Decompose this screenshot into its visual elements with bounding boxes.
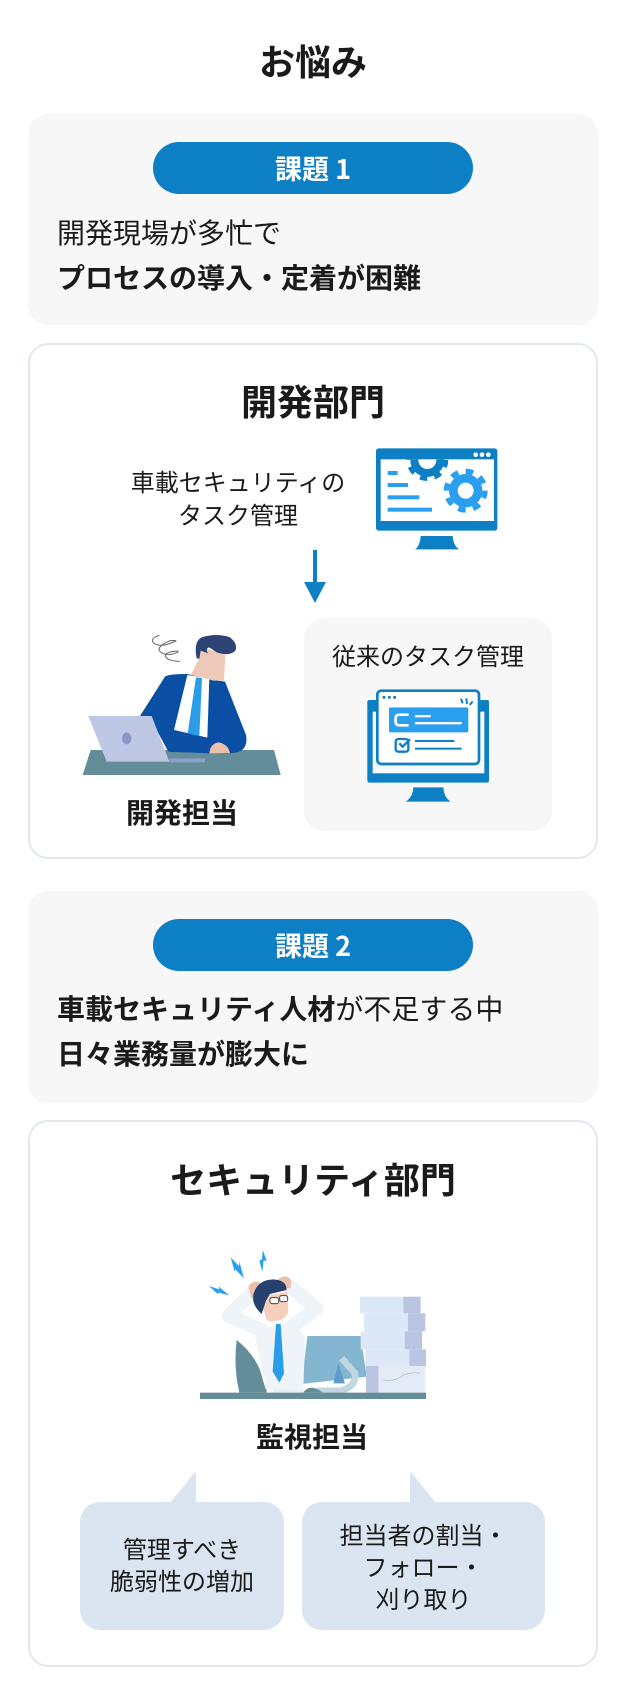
illustration: stressed monitoring officer [200, 1250, 426, 1399]
badge: issue 2 [153, 919, 473, 971]
arrow: down [304, 550, 326, 603]
text: automotive security task management: 車載セキュリティの [131, 470, 345, 497]
label: monitoring officer: 監視担当 [256, 1422, 368, 1453]
panel: conventional task management [304, 618, 552, 831]
callout: managed vulnerabilities [80, 1471, 284, 1630]
text: issue 2 description: 日々業務量が膨大に [57, 1039, 309, 1070]
text: issue 1 description: 開発現場が多忙で [57, 218, 281, 249]
callout: managed vulnerabilities: 管理すべき [123, 1537, 241, 1564]
text: issue 2 description [57, 994, 503, 1070]
label: developer: 開発担当 [126, 798, 238, 829]
heading: conventional task management: 従来のタスク管理 [332, 644, 524, 671]
text: automotive security task management: タスク管理 [178, 503, 298, 530]
badge: issue 1 [153, 142, 473, 194]
panel: issue 1 [28, 114, 598, 325]
panel: issue 2 [28, 891, 598, 1103]
badge: issue 1: 課題 1 [275, 148, 351, 187]
heading: development department: 開発部門 [241, 382, 385, 423]
badge: issue 2: 課題 2 [275, 925, 351, 964]
text: issue 1 description: プロセスの導入・定着が困難 [57, 263, 421, 294]
text: issue 1 description [57, 218, 421, 294]
text: issue 2 description: 車載セキュリティ人材が不足する中 [57, 994, 503, 1025]
icon: monitor with task window [367, 689, 489, 802]
text: automotive security task management [131, 470, 345, 530]
callout: assignee allocation: 刈り取り [376, 1587, 472, 1614]
panel: development department [28, 343, 598, 859]
icon: monitor with gears [376, 448, 498, 550]
callout: managed vulnerabilities: 脆弱性の増加 [110, 1569, 254, 1596]
heading: security department: セキュリティ部門 [170, 1160, 456, 1201]
callout: assignee allocation: フォロー・ [364, 1555, 484, 1582]
illustration: tired developer at laptop [82, 634, 281, 775]
panel: security department [28, 1120, 598, 1667]
title: お悩み [259, 42, 367, 83]
callout: assignee allocation: 担当者の割当・ [340, 1523, 508, 1550]
callout: assignee allocation [302, 1471, 545, 1630]
